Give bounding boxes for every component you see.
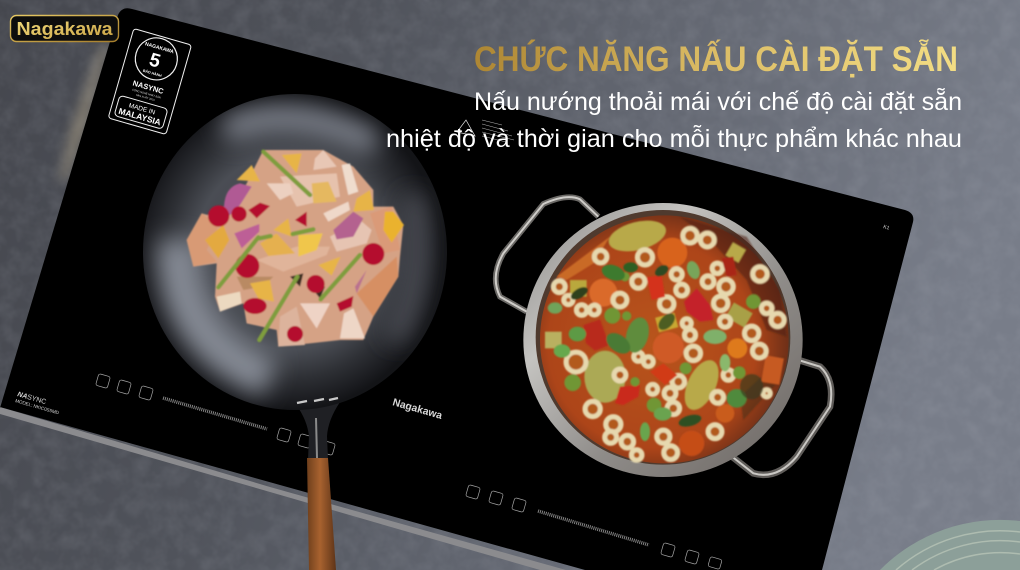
- lemon and pineapple pieces: [205, 153, 404, 302]
- warning label on glass: [457, 120, 514, 142]
- title: CHỨC NĂNG NẤU CÀI ĐẶT SẴN: [474, 39, 958, 79]
- pasta rings: [553, 228, 784, 460]
- red peppers: [583, 257, 737, 405]
- plate at bottom right: [880, 520, 1020, 570]
- logo: Nagakawa: [10, 16, 118, 42]
- pot left handle: [496, 197, 598, 312]
- wok wooden handle: [297, 402, 340, 570]
- small mark top right of glass: K1: [882, 224, 890, 232]
- warranty badge: 5: [147, 49, 163, 73]
- right control panel: [466, 485, 722, 569]
- warranty badge: BẢO HÀNH: [142, 68, 163, 78]
- model text: [15, 391, 60, 416]
- warranty badge: NAGAKAWA: [144, 41, 175, 55]
- left control panel: [96, 374, 335, 455]
- peas and herbs: [548, 259, 763, 441]
- warranty badge: [108, 29, 192, 134]
- description text: nhiệt độ và thời gian cho mỗi thực phẩm khác nhau: [386, 124, 962, 153]
- steel pot with soup: [496, 197, 831, 477]
- stir-fried food: [187, 150, 404, 347]
- warranty badge: MALAYSIA: [117, 106, 162, 127]
- warranty badge: NASYNC: [132, 79, 165, 96]
- pot right handle: [730, 360, 831, 475]
- red onion: [224, 183, 367, 293]
- warranty badge: CÔNG NGHỆ NHẬT BẢN: [132, 87, 162, 100]
- description text: [386, 87, 962, 153]
- model text: NASYNC: [16, 391, 47, 406]
- warranty badge: SẢN XUẤT 2023: [135, 92, 156, 102]
- carrots: [589, 238, 784, 456]
- cooktop brand name: Nagakawa: [391, 396, 444, 422]
- description text: Nấu nướng thoải mái với chế độ cài đặt sẵn: [474, 87, 962, 116]
- zucchini: [545, 215, 753, 415]
- wok with handle: [143, 94, 447, 570]
- asparagus: [218, 152, 360, 340]
- cherries: [208, 203, 384, 342]
- warranty badge: MADE IN: [128, 102, 156, 117]
- model text: MODEL: NKIC0S5MD: [15, 398, 60, 416]
- logo: Nagakawa: Nagakawa: [16, 18, 113, 39]
